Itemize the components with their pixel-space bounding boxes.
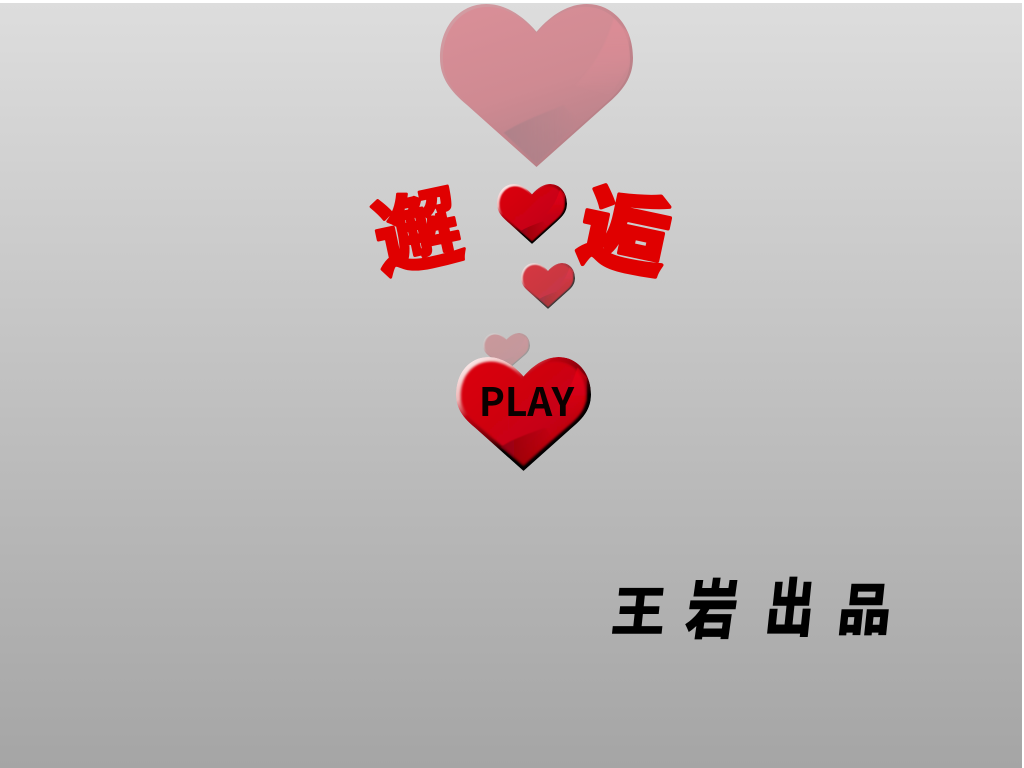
credit text: 出 (762, 558, 820, 650)
icon: faint rising heart (483, 333, 530, 371)
icon: small red heart (497, 184, 567, 244)
play label: PLAY (479, 372, 574, 428)
credit text: 品 (834, 565, 897, 646)
credit text: 王 (608, 568, 671, 647)
credit text (608, 558, 897, 652)
icon: small semi-faded heart (521, 263, 575, 309)
icon: play heart (456, 357, 591, 471)
title character left: 邂 (361, 157, 472, 297)
icon: large faded heart (440, 4, 633, 167)
title character right: 逅 (570, 157, 681, 297)
play button (456, 357, 591, 471)
credit text: 岩 (681, 558, 745, 652)
